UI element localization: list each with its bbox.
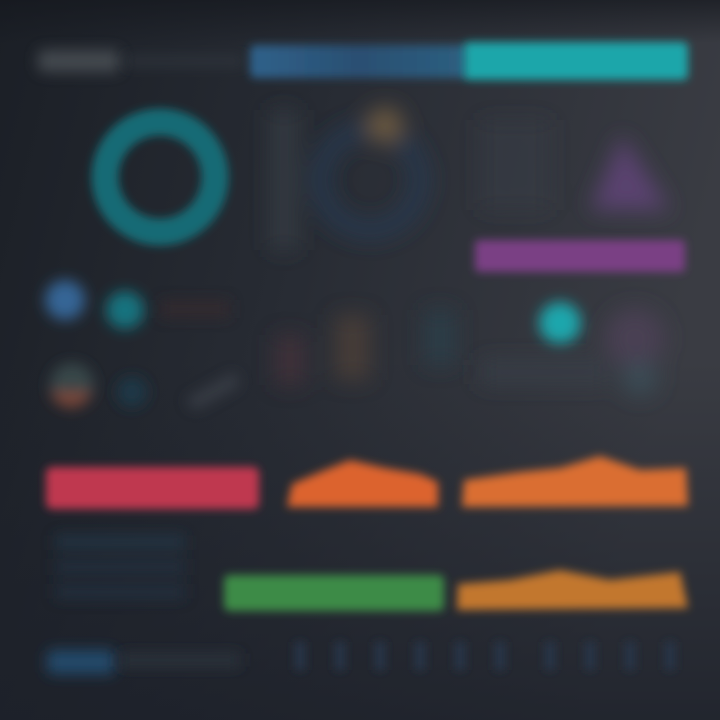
footer: blue label	[47, 650, 115, 674]
icon: bright teal circle	[539, 302, 581, 344]
bar: red	[46, 467, 259, 509]
chart: faint purple donut	[480, 308, 665, 396]
header: subtitle placeholder	[125, 55, 245, 67]
icon: blue circle	[45, 280, 85, 320]
text block: left blue lines	[55, 535, 185, 599]
chart: middle column chart	[275, 310, 455, 385]
header: blue bar	[250, 45, 468, 78]
chart: faint pie	[270, 107, 420, 250]
chart: purple triangle	[480, 120, 670, 210]
area: orange right	[462, 456, 688, 507]
bar: green	[224, 575, 444, 611]
label: faint slanted text	[185, 372, 240, 410]
label: muted red text	[160, 300, 230, 318]
area: orange lower	[457, 570, 688, 610]
footer: muted label	[120, 653, 240, 667]
header: teal bar	[464, 42, 688, 80]
area: orange middle	[287, 460, 438, 507]
legend: purple bar	[475, 240, 685, 272]
icon: multicolour circle	[50, 363, 94, 407]
icon: faint blue circle	[117, 377, 147, 407]
icon: teal circle	[106, 291, 144, 329]
chart: teal donut	[105, 122, 215, 232]
footer: axis ticks	[295, 642, 675, 670]
header: title placeholder	[38, 50, 120, 72]
